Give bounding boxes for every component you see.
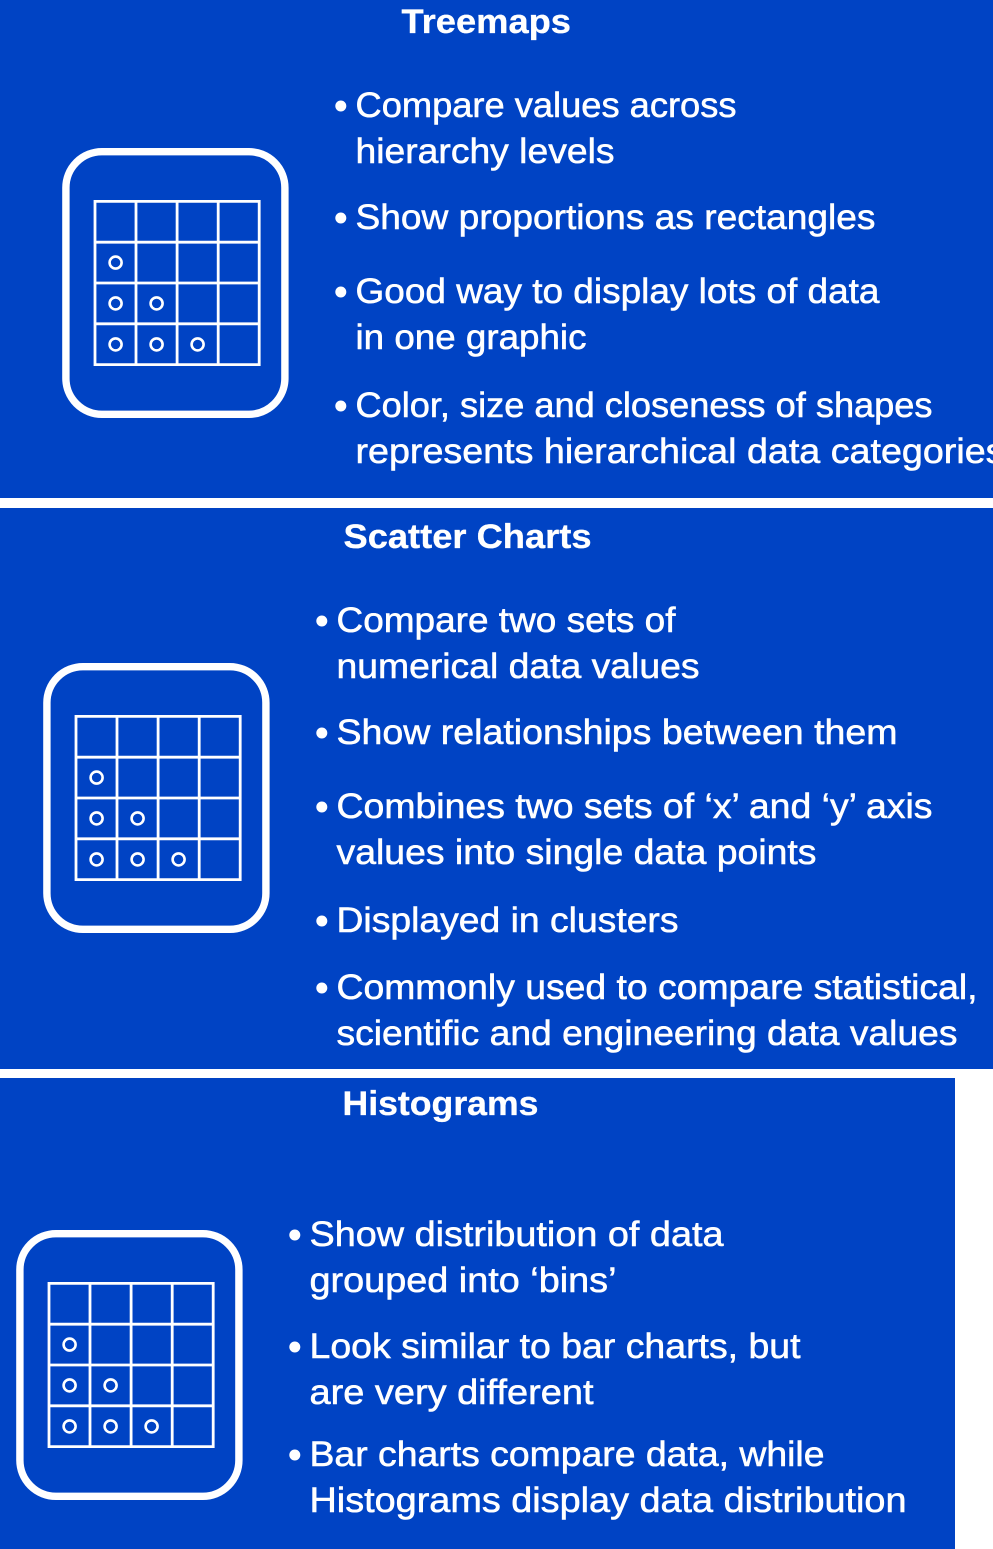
panel: histograms [0,1078,955,1549]
bullet list: histograms: Look similar to bar charts, but [310,1327,801,1366]
bullet list: treemaps [335,86,993,471]
bullet list: treemaps: hierarchy levels [356,132,614,171]
panel: scatter charts [0,508,993,1069]
heading: histograms: Histograms [342,1085,538,1123]
bullet list: treemaps: Good way to display lots of data [356,272,880,311]
bullet list: scatter charts: Show relationships between them [336,713,898,752]
bullet list: scatter charts: Compare two sets of [336,601,676,640]
bullet list: treemaps: Compare values across [356,86,736,125]
panel: treemaps [0,0,993,498]
bullet list: histograms: Bar charts compare data, while [310,1435,824,1474]
bullet list: histograms: are very different [310,1373,594,1412]
bullet list: histograms: Show distribution of data [310,1215,724,1254]
bullet list: scatter charts: scientific and engineering data values [336,1014,958,1053]
bullet list: treemaps: Show proportions as rectangles [356,198,876,237]
heading: treemaps: Treemaps [402,3,571,41]
bullet list: treemaps: Color, size and closeness of shapes [356,386,932,425]
bullet list: treemaps: represents hierarchical data categories [356,432,993,471]
bullet list: scatter charts: Commonly used to compare statistical, [336,968,978,1007]
icon: grid with circles [66,152,285,414]
bullet list: histograms: Histograms display data distribution [310,1481,906,1520]
bullet list: histograms: grouped into ‘bins’ [310,1261,616,1300]
bullet list: scatter charts: Combines two sets of ‘x’ and ‘y’ axis [336,787,932,826]
bullet list: scatter charts: values into single data points [336,833,816,872]
bullet list: scatter charts: Displayed in clusters [336,901,678,940]
icon: grid with circles [20,1234,239,1496]
icon: grid with circles [47,667,266,929]
bullet list: scatter charts: numerical data values [336,647,700,686]
bullet list: scatter charts [316,601,978,1053]
bullet list: histograms [289,1215,906,1520]
heading: scatter charts: Scatter Charts [344,518,592,556]
bullet list: treemaps: in one graphic [356,318,586,357]
